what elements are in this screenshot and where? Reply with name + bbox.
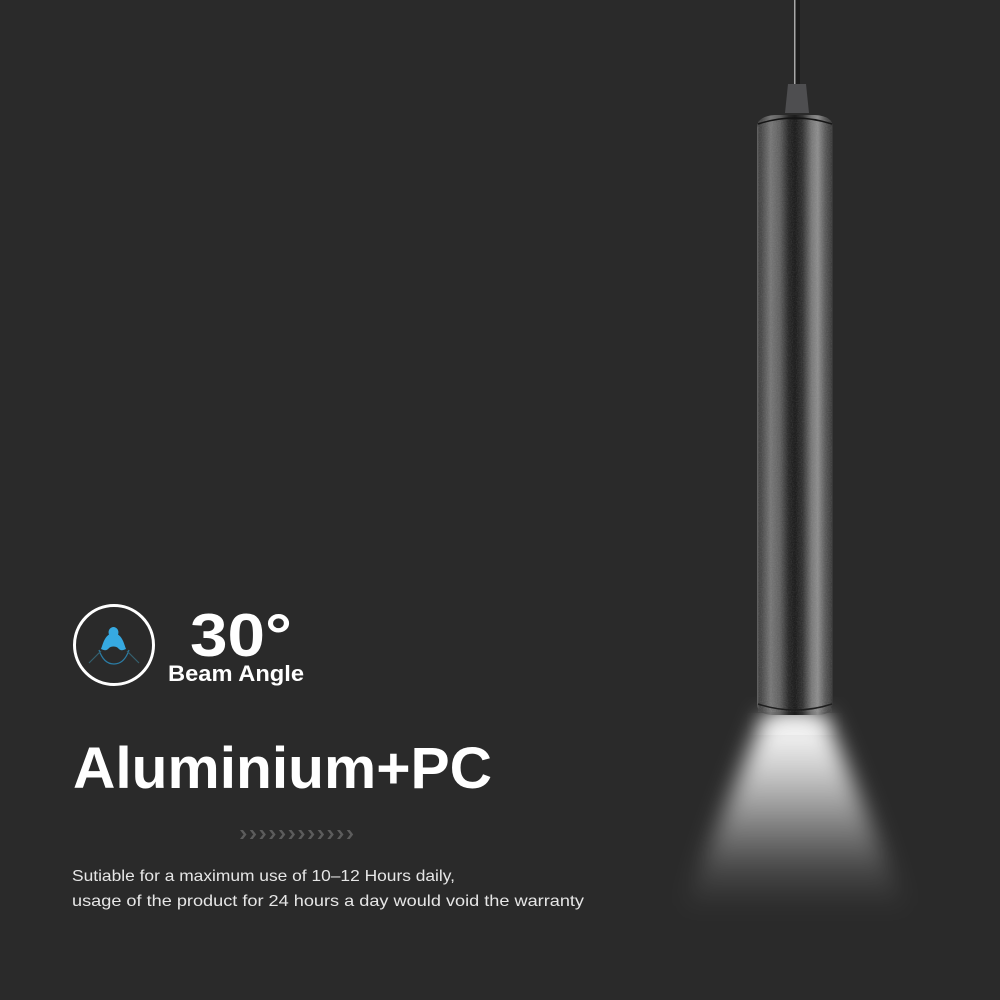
light beam bbox=[682, 715, 908, 910]
icon: beam angle badge bbox=[74, 606, 154, 684]
cable gland bbox=[785, 84, 809, 113]
beam angle value: 30° bbox=[190, 602, 292, 669]
lamp cylinder bbox=[757, 115, 833, 715]
material heading: Aluminium+PC bbox=[73, 736, 492, 801]
cylinder grain bbox=[758, 120, 832, 712]
warranty note: Sutiable for a maximum use of 10–12 Hours daily, bbox=[72, 868, 455, 885]
pendant lamp bbox=[757, 0, 833, 715]
cable highlight bbox=[794, 0, 796, 84]
cylinder bottom rim bbox=[758, 704, 832, 710]
beam angle label: Beam Angle bbox=[168, 661, 304, 686]
suspension cable bbox=[794, 0, 800, 84]
warranty note bbox=[72, 868, 584, 910]
chevron divider bbox=[240, 830, 353, 839]
cylinder top rim bbox=[758, 118, 832, 124]
warranty note: usage of the product for 24 hours a day would void the warranty bbox=[72, 893, 584, 910]
